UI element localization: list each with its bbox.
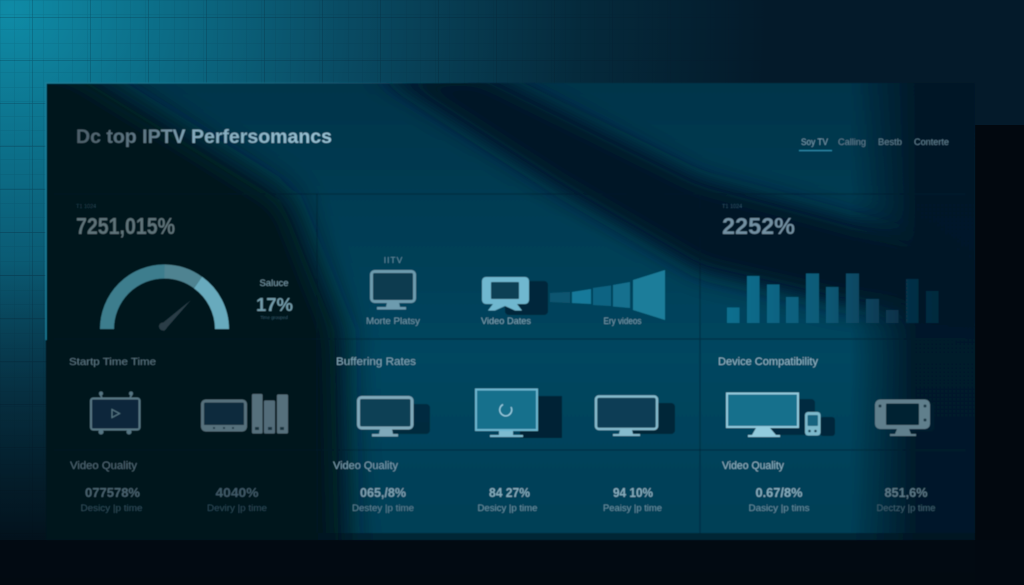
navigation tabs: Bestb [878, 137, 902, 147]
headline stat: 2252% [722, 213, 795, 239]
icon: handheld monitor [875, 400, 934, 436]
gauge readout: Time grouped [260, 315, 288, 320]
metric: 077578% [80, 486, 142, 514]
metric: 4040% [207, 486, 267, 514]
icon: monitor with spinner [476, 390, 562, 438]
metric: 077578%: 077578% [85, 486, 140, 500]
panel: platform icons: IITV [384, 255, 403, 265]
heading: video quality left: Video Quality [70, 460, 138, 472]
headline stat: 7251,015% [76, 213, 175, 239]
funnel chart [550, 270, 665, 320]
metric: 0.67/8%: 0.67/8% [756, 486, 802, 500]
navigation tabs: Calling [838, 137, 866, 147]
metric: 94 10%: 94 10% [613, 486, 653, 500]
heading: video quality right: Video Quality [722, 460, 784, 472]
icon: monitor dark [596, 396, 675, 436]
icon: monitor and phone [727, 394, 835, 437]
icon: monitor [358, 398, 430, 436]
panel: stat gauge [76, 204, 293, 331]
metric: 851,6%: 851,6% [884, 486, 928, 500]
metric: 94 10% [603, 486, 662, 514]
navigation tabs: Soy TV [801, 137, 828, 147]
navigation tabs: Conterte [914, 137, 949, 147]
panel: platform icons: Video Dates [481, 316, 531, 327]
icon: monitor outline [372, 272, 414, 310]
panel: bar chart stat [722, 204, 938, 323]
icon: tv with play button [91, 392, 140, 434]
panel: platform icons: Morte Platsy [366, 316, 420, 327]
gauge [107, 272, 222, 331]
metric: 84 27% [478, 486, 538, 514]
metric: 077578%: Desicy |p time [80, 503, 142, 514]
title: Dc top IPTV Perfersomancs [76, 127, 332, 148]
metric: 065,8%: 065,/8% [360, 486, 406, 500]
metric: 4040%: 4040% [216, 486, 258, 500]
icon: tablet and books [202, 394, 288, 434]
panel: stat gauge: T1 1024 [76, 204, 96, 210]
metric: 4040%: Deviry |p time [207, 503, 267, 514]
panel: platform icons: Ery videos [604, 316, 642, 327]
dashboard panel [44, 82, 976, 540]
metric: 065,8%: Destey |p time [352, 503, 414, 514]
metric: 84 27%: Desicy |p time [478, 503, 538, 514]
metric: 0.67/8% [748, 486, 810, 514]
metric: 94 10%: Peaisy |p time [603, 503, 662, 514]
gauge readout [256, 278, 293, 320]
gauge readout: 17% [256, 294, 293, 315]
metric: 851,6% [876, 486, 936, 514]
icon: filled monitor with shadow [482, 277, 548, 315]
bar chart [727, 274, 938, 323]
heading: startup time: Startp Time Time [69, 356, 156, 368]
panel: platform icons [366, 255, 665, 327]
navigation tabs [799, 137, 949, 151]
metric: 84 27%: 84 27% [489, 486, 530, 500]
metric: 851,6%: Dectzy |p time [876, 503, 936, 514]
heading: video quality center: Video Quality [333, 460, 398, 472]
card grid lines [54, 194, 965, 533]
heading: device compatibility: Device Compatibility [718, 356, 818, 368]
panel: bar chart stat: T1 1024 [722, 204, 742, 210]
metric: 065,8% [352, 486, 414, 514]
gauge readout: Saluce [259, 278, 289, 289]
heading: buffering rates: Buffering Rates [336, 356, 417, 368]
metric: 0.67/8%: Dasicy |p tims [748, 503, 810, 514]
